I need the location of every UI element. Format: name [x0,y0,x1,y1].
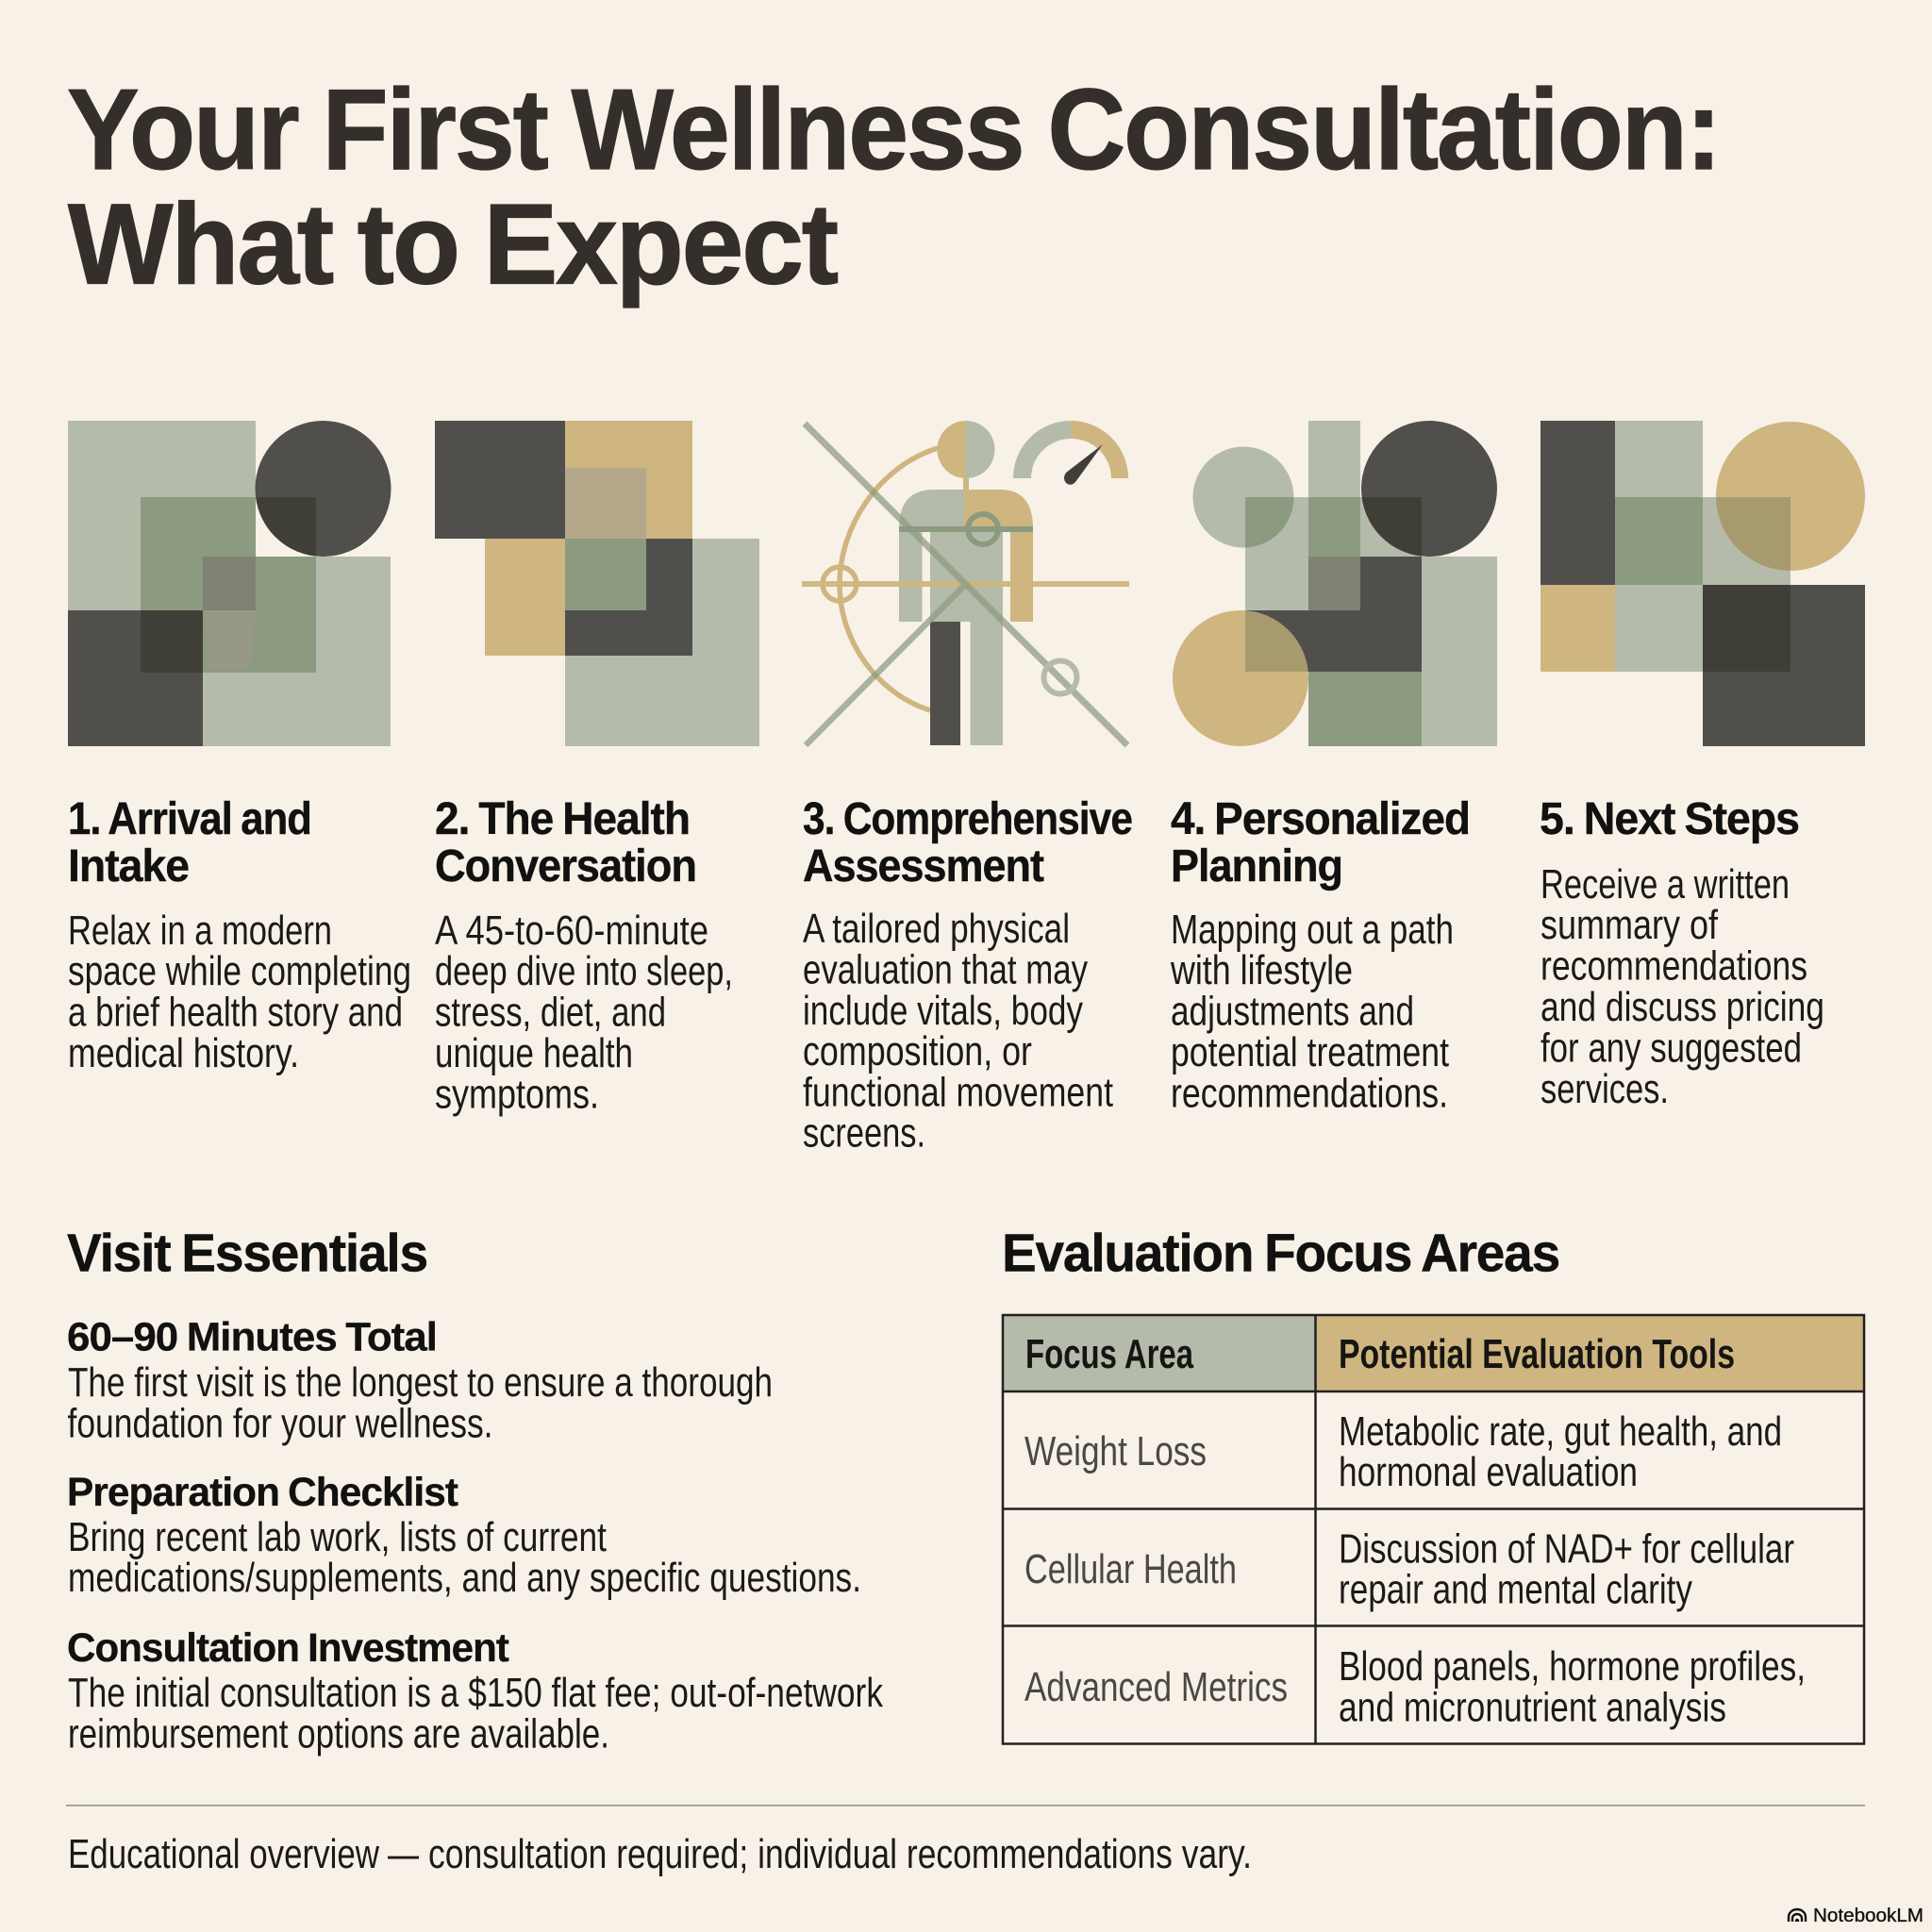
text block: 60-90 minutes total: The first visit is the longest to ensure a thorough [68,1360,773,1406]
icon: NotebookLM logo [1789,1909,1806,1922]
heading: step 3 [803,794,1132,891]
text block: consultation investment: The initial consultation is a $150 flat fee; out-of-network [68,1671,883,1716]
icon: horizontal measurement line [802,581,1129,587]
text: step 3 description: A tailored physical [803,907,1070,952]
text block: consultation investment [67,1626,883,1757]
table row: cellular health: Discussion of NAD+ for cellular [1339,1526,1794,1572]
panel: step 4 personalized planning [1170,421,1497,1117]
table row: cellular health: repair and mental clarity [1339,1568,1692,1613]
icon: diagonal measurement lines [805,424,1127,745]
text block: 60-90 minutes total [67,1315,773,1447]
heading: step 4: 4. Personalized [1171,794,1470,844]
text: step 4 description: Mapping out a path [1171,908,1454,953]
text: step 3 description: screens. [803,1111,925,1157]
text: step 4 description: potential treatment [1171,1030,1449,1075]
text: step 2 description: deep dive into sleep, [435,949,733,994]
table grid lines [1003,1315,1864,1743]
icon: human figure [899,421,1033,745]
table: focus areas and evaluation tools [1002,1314,1864,1743]
footer disclaimer: Educational overview [68,1832,379,1877]
text block: consultation investment: reimbursement options are available. [68,1711,609,1757]
table header: focus area [1002,1314,1315,1391]
panel: step 3 comprehensive assessment [802,421,1132,1157]
text: step 2 description: symptoms. [435,1072,599,1117]
table row: advanced metrics: and micronutrient analysis [1339,1685,1726,1730]
footer disclaimer: consultation required; individual recommendations vary. [428,1832,1252,1877]
text block: preparation checklist: medications/supplements, and any specific questions. [68,1556,861,1601]
heading: step 1 [68,794,311,891]
text block: preparation checklist: Bring recent lab work, lists of current [68,1515,607,1560]
heading: step 4 [1171,794,1470,891]
text: step 1 description: medical history. [68,1031,299,1076]
footer rule [66,1805,1865,1807]
text block: preparation checklist: Preparation Checklist [67,1471,458,1515]
table row: weight loss: Metabolic rate, gut health, and [1339,1409,1782,1455]
heading: step 4: Planning [1171,841,1342,891]
heading: evaluation focus areas: Evaluation Focus Areas [1002,1223,1559,1283]
panel: evaluation focus areas [1002,1223,1864,1743]
icon: gauge [1013,421,1128,485]
table row: advanced metrics: Blood panels, hormone profiles, [1339,1644,1806,1690]
title: Your First Wellness Consultation: [67,65,1720,193]
table header: potential evaluation tools [1315,1314,1864,1391]
text: step 1 description: Relax in a modern [68,908,332,954]
text block: consultation investment: Consultation Investment [67,1626,509,1671]
footer disclaimer [68,1832,1252,1877]
table header: potential evaluation tools: Potential Evaluation Tools [1339,1332,1735,1377]
heading: visit essentials: Visit Essentials [67,1223,427,1283]
table row: weight loss [1024,1409,1782,1495]
heading: step 3: Assessment [803,841,1044,891]
text: step 3 description [803,907,1113,1157]
panel: step 1 arrival and intake [68,421,411,1076]
text: step 4 description: with lifestyle [1170,948,1353,993]
watermark: NotebookLM: NotebookLM [1813,1906,1924,1926]
heading: step 2: Conversation [435,841,696,891]
table row: advanced metrics: Advanced Metrics [1024,1665,1288,1710]
illustration: step 1 geometric composition [68,421,391,746]
icon: left target ring [823,567,857,601]
illustration: step 5 geometric composition [1541,421,1865,746]
text: step 5 description: services. [1541,1067,1669,1112]
heading: step 5: 5. Next Steps [1540,794,1799,844]
heading: step 2 [435,794,696,891]
heading: step 1: Intake [68,841,189,891]
icon: measurement arc [840,448,938,710]
footer disclaimer: — [388,1832,419,1877]
text: step 3 description: include vitals, body [803,989,1083,1034]
text: step 1 description [68,908,411,1076]
text: step 3 description: evaluation that may [803,947,1088,992]
text: step 1 description: a brief health story and [68,991,403,1036]
table row: weight loss: hormonal evaluation [1339,1450,1638,1495]
text: step 2 description: unique health [435,1031,633,1076]
heading: step 2: 2. The Health [435,794,690,844]
text: step 2 description [435,908,733,1117]
text: step 2 description: A 45-to-60-minute [435,908,708,954]
heading: step 3: 3. Comprehensive [803,794,1132,844]
text: step 5 description: and discuss pricing [1541,985,1824,1030]
heading: step 1: 1. Arrival and [68,794,311,844]
illustration: step 2 geometric composition [435,421,759,746]
title [67,65,1720,308]
text: step 3 description: composition, or [803,1029,1032,1074]
text block: 60-90 minutes total: foundation for your wellness. [68,1402,492,1447]
panel: step 2 the health conversation [435,421,759,1117]
illustration: step 4 geometric composition [1173,421,1497,746]
text block: preparation checklist [67,1471,861,1601]
table header: focus area: Focus Area [1025,1332,1194,1377]
icon: chest ring [968,514,998,544]
text: step 3 description: functional movement [803,1070,1113,1115]
text: step 5 description [1541,862,1824,1112]
title: What to Expect [68,179,839,308]
text: step 5 description: recommendations [1541,943,1807,989]
text: step 4 description: recommendations. [1171,1072,1448,1117]
text: step 1 description: space while completing [68,949,411,994]
text: step 2 description: stress, diet, and [435,991,666,1036]
text: step 5 description: for any suggested [1541,1026,1802,1072]
text: step 4 description: adjustments and [1171,989,1414,1034]
icon: lower right ring [1043,660,1077,694]
text: step 5 description: summary of [1541,903,1719,948]
illustration: step 3 figure with gauge and measurement lines [802,421,1129,745]
text block: 60-90 minutes total: 60–90 Minutes Total [67,1315,437,1360]
table row: weight loss: Weight Loss [1024,1429,1207,1474]
panel: step 5 next steps [1540,421,1865,1112]
table row: advanced metrics [1024,1644,1806,1730]
panel: visit essentials [67,1223,883,1757]
text: step 4 description [1170,908,1454,1117]
table row: cellular health [1024,1526,1794,1613]
table row: cellular health: Cellular Health [1024,1547,1237,1592]
text: step 5 description: Receive a written [1541,862,1790,908]
